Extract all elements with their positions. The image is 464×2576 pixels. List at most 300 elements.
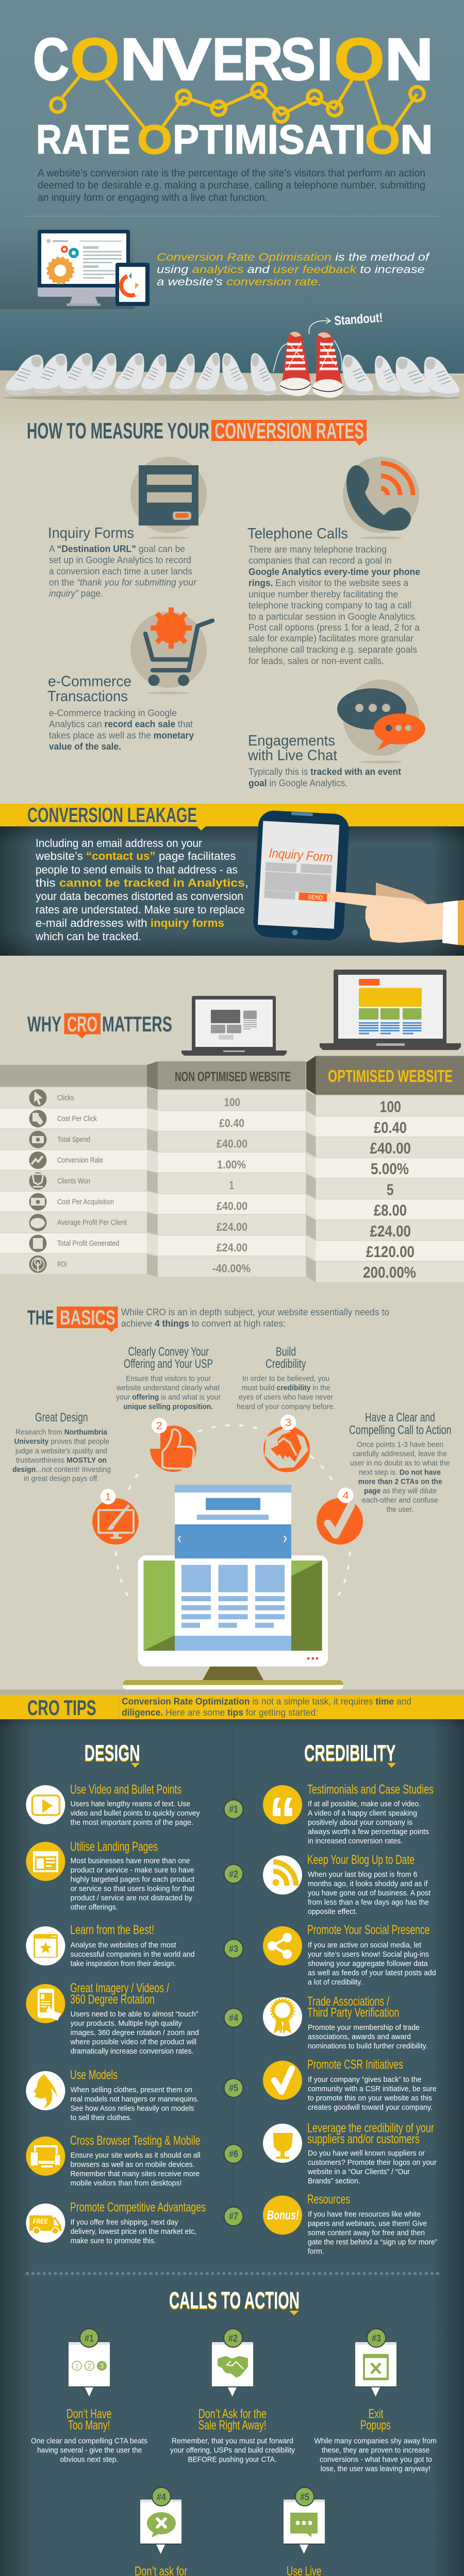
icon: pointing hand	[327, 883, 464, 945]
tip: landing pages: or service so that users looking for that	[71, 1884, 195, 1893]
card: sale right away: Sale Right Away!	[198, 2418, 267, 2433]
table optimised values: 5.00%	[371, 1160, 409, 1178]
tip: bonus resources: gate the rest behind a “sign up for more”	[308, 2238, 437, 2246]
icon: red high-top shoes	[273, 331, 343, 398]
table optimised values: £40.00	[370, 1139, 411, 1157]
title: O	[137, 116, 172, 162]
icon: star window	[26, 1926, 65, 1965]
table non optimised values: 1.00%	[217, 1158, 246, 1171]
icon: x speech bubble card: #4	[157, 2492, 166, 2503]
card: exit popups: these, they are proven to increase	[322, 2446, 430, 2455]
tip: blog: Keep Your Blog Up to Date	[307, 1853, 415, 1867]
table non optimised values: £24.00	[217, 1221, 247, 1233]
tip: video and bullet points: the most important points of the page.	[71, 1818, 193, 1827]
tip: great imagery: Great Imagery / Videos /	[70, 1981, 169, 1995]
tip: leverage suppliers: Do you have well known suppliers or	[308, 2149, 425, 2158]
intro text: an inquiry form or engaging with a live chat function.	[38, 192, 268, 204]
tip: learn from the best: Analyse the websites of the most	[71, 1941, 176, 1950]
tip: video and bullet points: Use Video and Bullet Points	[70, 1782, 181, 1797]
table optimised values: 200.00%	[363, 1263, 416, 1281]
tip: use models: real models not hangers or mannequins.	[71, 2095, 199, 2104]
tip: csr: Promote CSR Initiatives	[307, 2058, 403, 2072]
definition text: a website’s conversion rate.	[157, 276, 322, 288]
panel: conversion leakage: website’s “contact us” page facilitates	[35, 850, 236, 862]
title: N	[385, 26, 434, 93]
text: clearly convey: website understand clearly what	[116, 1384, 220, 1392]
text: build credibility: Build	[276, 1345, 296, 1359]
panel: shoes photo	[0, 309, 464, 443]
table optimised values: £0.40	[374, 1118, 407, 1137]
tip: landing pages	[26, 1839, 195, 1911]
tip: competitive advantages: If you offer free shipping, next day	[71, 2218, 178, 2227]
text: clearly convey: unique selling proposition.	[124, 1402, 213, 1411]
table non optimised values: £40.00	[217, 1199, 247, 1213]
icon: quotation mark: “	[269, 1785, 296, 1856]
icon: step 4 check mark	[317, 1488, 363, 1545]
card: exit popups: Popups	[360, 2418, 391, 2433]
table non optimised values: £0.40	[219, 1116, 244, 1129]
icon: devices	[26, 2137, 65, 2176]
tip: video and bullet points: video and bullet points to quickly convey	[71, 1809, 200, 1818]
icon: step 2 thumbs up	[150, 1418, 196, 1472]
tip: social presence: showing your aggregate follower data	[308, 1959, 428, 1968]
tip: great imagery: 360 Degree Rotation	[70, 1992, 155, 2007]
table optimised values: 100	[379, 1098, 401, 1116]
icon: monitor and tablet	[38, 230, 150, 306]
card: don't have too many: One clear and compelling CTA beats	[31, 2437, 147, 2446]
icon: telephone	[343, 456, 419, 539]
panel: inquiry forms: A “Destination URL” goal can be	[49, 544, 185, 554]
text: great design: in great design pays off.	[24, 1475, 99, 1483]
card: exit popups: While many companies shy away from	[314, 2437, 437, 2446]
icon: step 3 handshake: 3	[285, 1417, 291, 1429]
text: call to action: Have a Clear and	[365, 1411, 435, 1425]
icon: model silhouette	[26, 2071, 65, 2110]
icon: landing page	[26, 1842, 65, 1881]
title: C	[33, 26, 69, 93]
table row labels: Clicks	[57, 1094, 74, 1103]
icon: free delivery truck	[26, 2204, 65, 2243]
tip: csr: creates goodwill toward your company.	[308, 2103, 433, 2112]
icon: optimised laptop	[320, 970, 461, 1050]
heading: how to measure: CONVERSION RATES	[214, 418, 364, 444]
title: O	[70, 26, 120, 93]
panel: e-commerce: e-Commerce tracking in Google	[49, 708, 177, 718]
tip: bonus resources: form.	[308, 2247, 324, 2256]
basics intro text	[121, 1307, 389, 1329]
tip: bonus resources: If you have free resources like white	[308, 2210, 421, 2219]
tip: testimonials	[263, 1782, 434, 1856]
tip: trade associations: Trade Associations /	[307, 1994, 389, 2009]
table non optimised values	[212, 1096, 251, 1275]
tip: trade associations: Promote your membership of trade	[308, 2023, 420, 2032]
table optimised values	[363, 1098, 416, 1281]
tip: csr: If your company “gives back” to the	[308, 2075, 422, 2084]
text: great design: University proves that people	[14, 1437, 109, 1446]
title: E	[212, 26, 244, 93]
icon: rss	[263, 1855, 302, 1894]
tip: competitive advantages: make sure to promote this.	[71, 2236, 156, 2245]
text: build credibility: eyes of users who have never	[239, 1393, 333, 1401]
tip: bonus resources: Resources	[307, 2192, 350, 2207]
heading: why cro matters: CRO	[67, 1012, 97, 1036]
table non optimised values: £40.00	[217, 1138, 247, 1150]
tip: use models: Use Models	[70, 2068, 118, 2082]
table non optimised values: £24.00	[217, 1241, 247, 1254]
heading: why cro matters: WHY	[27, 1012, 61, 1036]
panel: e-commerce: value of the sale.	[49, 741, 121, 752]
panel: live chat: goal in Google Analytics.	[248, 778, 347, 788]
tip: great imagery: dramatically increase conversion rates.	[71, 2047, 193, 2056]
title: O	[334, 26, 385, 93]
tip: social presence: a lot of credibility.	[308, 1978, 362, 1987]
table optimised values: £24.00	[370, 1222, 411, 1240]
card: exit popups: lose, the user was leaving anyway!	[321, 2465, 430, 2473]
table header row: NON OPTIMISED WEBSITE	[175, 1069, 291, 1084]
tip: landing pages: Most businesses have more than one	[71, 1857, 190, 1865]
tip: competitive advantages: delivery, lowest price on the market etc,	[71, 2227, 196, 2236]
panel: telephone calls: Post call options (press 1 for a lead, 2 for a	[248, 622, 420, 633]
card: don't have too many: Don’t Have	[67, 2407, 111, 2421]
tip: trade associations: Third Party Verification	[307, 2006, 399, 2020]
table row labels: ROI	[57, 1260, 67, 1268]
tip: csr: to promote this on your website as this	[308, 2094, 432, 2103]
heading: calls to action	[169, 2287, 300, 2315]
tip: cross browser testing: Remember that many sites receive more	[71, 2170, 200, 2178]
timeline badges: #7	[229, 2211, 238, 2222]
card: sale right away: your offering, USPs and build credibility	[170, 2446, 295, 2455]
panel: inquiry forms: a conversion each time a user lands	[49, 566, 192, 577]
text: call to action: next step is. Do not have	[359, 1468, 441, 1477]
panel: telephone calls: to a particular session in Google Analytics.	[248, 612, 417, 622]
heading: the basics: THE	[27, 1307, 54, 1329]
text: build credibility	[237, 1345, 335, 1411]
heading: why cro matters: MATTERS	[102, 1012, 172, 1036]
text: great design: judge a website's quality and	[15, 1447, 107, 1455]
tip: trade associations	[263, 1994, 428, 2050]
card: exit popups: Exit	[369, 2407, 383, 2421]
icon: chat bubbles	[337, 680, 425, 764]
title: O	[365, 116, 400, 162]
tip: competitive advantages	[26, 2200, 206, 2245]
tip: testimonials: If at all possible, make use of video.	[308, 1800, 421, 1808]
heading: the basics: BASICS	[60, 1307, 115, 1329]
panel: e-commerce: e-Commerce	[48, 673, 131, 690]
panel: conversion leakage: this cannot be tracked in Analytics ,	[36, 876, 248, 889]
icon: free delivery truck: FREE	[33, 2217, 48, 2225]
text: clearly convey: Ensure that visitors to your	[126, 1375, 211, 1383]
icon: chat window card: #5	[300, 2492, 309, 2503]
heading: how to measure: HOW TO MEASURE YOUR	[27, 418, 209, 444]
icon: trophy	[263, 2124, 302, 2163]
tip: cross browser testing	[26, 2133, 201, 2188]
tip: trade associations: nominations to build further credibility.	[308, 2042, 428, 2050]
card: don't have too many: obvious next step.	[60, 2455, 119, 2464]
tip: great imagery: your products. Multiple high quality	[71, 2019, 182, 2028]
intro text: A website’s conversion rate is the percentage of the site’s visitors that perform an action	[38, 168, 425, 179]
icon: bonus badge: Bonus!	[267, 2208, 299, 2223]
card: sale right away: BEFORE pushing your CTA.	[188, 2455, 277, 2464]
panel: conversion leakage: Including an email address on your	[36, 837, 202, 850]
tip: learn from the best	[26, 1923, 195, 1968]
panel: conversion leakage: your data becomes distorted as conversion	[36, 890, 243, 903]
panel: telephone calls: Google Analytics every-time your phone	[248, 567, 420, 577]
basics intro text: achieve 4 things to convert at high rates:	[121, 1318, 286, 1329]
tip: blog: months ago, it looks shoddy and as if	[308, 1879, 428, 1888]
text: build credibility: heard of your company before.	[237, 1402, 335, 1411]
timeline badges: #3	[229, 1944, 238, 1955]
panel: live chat	[247, 680, 425, 788]
text: call to action: page as they will dilute	[364, 1487, 437, 1496]
icon: numbered circles card: 3	[100, 2362, 104, 2370]
icon: award ribbon	[263, 1997, 302, 2037]
basics intro text: While CRO is an in depth subject, your website essentially needs to	[121, 1307, 389, 1317]
tip: testimonials: A video of a happy client speaking	[308, 1809, 417, 1818]
card: exit popups	[314, 2329, 437, 2473]
callout: standout arrow: Standout!	[334, 310, 383, 328]
tip: video and bullet points: Users hate lengthy reams of text. Use	[71, 1800, 190, 1808]
tip: bonus resources	[263, 2192, 437, 2256]
table row labels: Cost Per Click	[57, 1114, 97, 1123]
icon: shopping cart	[130, 607, 212, 694]
panel: e-commerce: takes place as well as the monetary	[49, 730, 194, 740]
table: why cro matters	[0, 1056, 464, 1282]
card: sale right away: Remember, that you must put forward	[172, 2437, 293, 2446]
tip: social presence: your site’s users know! Social plug-ins	[308, 1950, 429, 1959]
tip: social presence: If you are active on social media, let	[308, 1941, 422, 1950]
card: don't have too many: Too Many!	[68, 2418, 110, 2433]
tip: blog: opposite effect.	[308, 1907, 357, 1916]
text: build credibility: In order to be believed, you	[242, 1375, 329, 1383]
panel: cro tips band	[0, 1695, 464, 1723]
title: R	[243, 26, 283, 93]
panel: tips dark background	[0, 1719, 464, 2576]
icon: exit window card	[355, 2329, 396, 2397]
icon: step 4 check mark: 4	[342, 1490, 349, 1501]
tip: bonus resources: papers and webinars, use them! Give	[308, 2219, 427, 2228]
tip: landing pages: other offerings.	[71, 1903, 118, 1911]
heading: why cro matters	[27, 1012, 172, 1039]
tip: leverage suppliers	[263, 2121, 437, 2185]
icon: step 1 design	[92, 1489, 139, 1545]
tip: leverage suppliers: website in a “Our Clients” / “Our	[307, 2167, 410, 2176]
text: build credibility: Credibility	[266, 1357, 306, 1371]
definition text: using analytics and user feedback to increase	[157, 264, 425, 276]
table row labels: Clients Won	[57, 1177, 90, 1185]
panel: hero	[0, 0, 464, 309]
text: great design: trustworthiness MOSTLY on	[16, 1456, 107, 1465]
heading: the basics	[27, 1307, 118, 1332]
panel: telephone calls: There are many telephone tracking	[248, 545, 387, 555]
tip: blog: When your last blog post is from 6	[308, 1870, 417, 1879]
title: PTIMISATI	[173, 116, 366, 162]
title: N	[120, 26, 167, 93]
tip: landing pages: product / service are not distracted by	[71, 1893, 192, 1902]
text: great design: Great Design	[35, 1411, 88, 1425]
tip: social presence: as well as feeds of your latest posts add	[308, 1969, 436, 1977]
tip: csr	[263, 2058, 437, 2112]
text: great design: design...not content! Investing	[12, 1465, 111, 1474]
tip: blog: you have gone out of business. A post	[308, 1889, 431, 1897]
table row labels: Conversion Rate	[57, 1156, 103, 1165]
text: clearly convey: Offering and Your USP	[124, 1357, 213, 1371]
text: clearly convey: your offering is and what is your	[116, 1393, 221, 1401]
tip: testimonials: in increased conversion rates.	[308, 1837, 403, 1845]
tip: leverage suppliers: customers? Promote their logos on your	[308, 2158, 437, 2167]
tip: great imagery: images, 360 degree rotation / zoom and	[71, 2028, 199, 2037]
table rows background	[0, 1088, 464, 1282]
tip: great imagery: where possible video of the product will	[70, 2038, 196, 2046]
arrows: dotted arcs	[116, 1425, 350, 1603]
panel: inquiry forms: set up in Google Analytics to record	[49, 555, 191, 565]
panel: conversion leakage: e-mail addresses with inquiry forms	[36, 917, 224, 929]
icon: phone touch	[26, 1984, 65, 2023]
panel: telephone calls: unique number thereby facilitating the	[248, 589, 398, 600]
text: call to action: more than 2 CTAs on the	[358, 1478, 442, 1486]
panel: e-commerce: Transactions	[47, 688, 128, 705]
icon: numbered circles card	[69, 2329, 110, 2397]
icon: bonus badge	[263, 2196, 302, 2235]
card: use live chat	[250, 2487, 358, 2576]
title: N	[400, 116, 433, 162]
icon: x speech bubble card	[140, 2487, 181, 2554]
icon: numbered circles card: 1	[75, 2362, 78, 2370]
card: don't have too many	[31, 2329, 147, 2464]
intro text: deemed to be desirable e.g. making a purchase, calling a telephone number, submitting	[38, 180, 425, 191]
icon: phone with inquiry form	[253, 810, 350, 941]
panel: inquiry forms	[48, 456, 207, 599]
table optimised values: £120.00	[366, 1243, 415, 1261]
icon: step 1 design: 1	[105, 1492, 111, 1503]
tip: testimonials: always worth a few percentage points	[308, 1827, 429, 1836]
panel: conversion leakage: rates are understated. Make sure to replace	[36, 903, 245, 916]
card: don't have too many: having several - give the user the	[37, 2446, 142, 2455]
title: RATE	[36, 116, 130, 162]
tip: landing pages: product or service - make sure to have	[71, 1866, 194, 1874]
panel: telephone calls: sale for example) facilitates more granular	[248, 633, 413, 643]
icon: check	[263, 2061, 302, 2100]
icon: handshake card	[212, 2329, 253, 2397]
title: S	[280, 26, 316, 93]
tip: landing pages: Utilise Landing Pages	[70, 1839, 158, 1854]
panel: e-commerce: Analytics can record each sale that	[49, 719, 193, 730]
icon: handshake card: #2	[228, 2333, 238, 2344]
tip: bonus resources: some content away for free and then	[308, 2229, 425, 2237]
card: sale right away	[170, 2329, 295, 2464]
tip: landing pages: highly targeted pages for each product	[71, 1875, 195, 1884]
table row labels: Total Profit Generated	[57, 1239, 119, 1248]
text: call to action: Once points 1-3 have been	[357, 1440, 443, 1449]
heading: credibility	[304, 1740, 396, 1768]
tip: cross browser testing: Cross Browser Testing & Mobile	[70, 2133, 201, 2148]
heading: design	[85, 1740, 140, 1768]
timeline badges: #1	[229, 1804, 238, 1815]
icon: chat window card	[284, 2487, 325, 2554]
text: call to action: carefully addressed, leave the	[353, 1450, 447, 1459]
timeline badges: #2	[229, 1869, 238, 1880]
tip: learn from the best: take inspiration from their design.	[71, 1959, 176, 1968]
tip: great imagery	[26, 1981, 199, 2056]
tip: cross browser testing: Ensure your site works as it should on all	[71, 2151, 201, 2160]
panel: telephone calls: for leads, sales or non-event calls.	[248, 656, 384, 666]
intro text	[38, 168, 425, 204]
tip: use models: See how Asos relies heavily on models	[71, 2104, 194, 2113]
tip: blog: from less than a few days ago has the	[308, 1898, 429, 1907]
panel: live chat: with Live Chat	[247, 747, 337, 764]
title: V	[163, 26, 211, 93]
title	[33, 26, 434, 162]
table row labels: Total Spend	[57, 1135, 90, 1144]
panel: conversion leakage: CONVERSION LEAKAGE	[27, 803, 197, 827]
tip: great imagery: Users need to be able to almost “touch”	[71, 2010, 198, 2019]
panel: cro tips band: CRO TIPS	[27, 1696, 96, 1720]
icon: exit window card: #3	[372, 2333, 381, 2344]
text: call to action	[349, 1411, 452, 1514]
panel: e-commerce	[47, 607, 212, 752]
panel: telephone calls: telephone tracking company to tag a call	[248, 600, 411, 611]
panel: telephone calls: companies that can record a goal in	[248, 555, 392, 566]
icon: phone with inquiry form: SEND	[308, 893, 323, 902]
tip: use models	[26, 2068, 199, 2122]
panel: inquiry forms: Inquiry Forms	[48, 525, 134, 541]
tip: learn from the best: Learn from the Best!	[70, 1923, 154, 1937]
tip: blog	[263, 1853, 431, 1916]
table non optimised values: -40.00%	[212, 1262, 251, 1275]
table row labels	[57, 1094, 127, 1268]
icon: numbered circles card: #1	[85, 2333, 94, 2344]
panel: cro tips band: Conversion Rate Optimization is not a simple task, it requires time and	[122, 1696, 411, 1706]
heading: design: DESIGN	[85, 1740, 140, 1766]
panel: inquiry forms: on the “thank you for submitting your	[49, 577, 197, 587]
text: clearly convey: Clearly Convey Your	[128, 1345, 209, 1359]
icon: non optimised laptop	[181, 996, 287, 1056]
table row labels: Cost Per Acquisition	[57, 1197, 114, 1206]
icon: phone with inquiry form: Inquiry Form	[269, 846, 333, 865]
table non optimised values: 100	[224, 1096, 240, 1109]
text: call to action: user in no doubt as to what the	[350, 1459, 450, 1468]
panel: telephone calls: Telephone Calls	[247, 526, 348, 542]
tip: social presence	[263, 1923, 436, 1987]
card: unnecessary info	[101, 2487, 221, 2576]
panel: cro tips band: diligence. Here are some tips for getting started:	[122, 1707, 318, 1718]
chart line decoration	[51, 75, 424, 128]
tip: use models: to sell their clothes.	[71, 2113, 132, 2122]
icon: share	[263, 1926, 302, 1965]
text: call to action: each-other and confuse	[362, 1496, 438, 1505]
panel: telephone calls: telephone call tracking e.g. separate goals	[248, 645, 417, 655]
card: sale right away: Don’t Ask for the	[198, 2407, 267, 2421]
panel: inquiry forms: inquiry” page.	[49, 588, 103, 599]
definition text: Conversion Rate Optimisation is the method of	[157, 251, 430, 263]
tip: cross browser testing: mobile visitors than from desktops!	[71, 2179, 181, 2188]
callout: standout arrow	[309, 310, 383, 334]
tip: use models: When selling clothes, present them on	[71, 2086, 192, 2094]
panel: telephone calls: rings. Each visitor to the website sees a	[248, 578, 409, 588]
heading: calls to action: CALLS TO ACTION	[169, 2287, 300, 2313]
icon: step 2 thumbs up: 2	[156, 1420, 162, 1432]
timeline badges	[224, 1800, 243, 2226]
panel: conversion leakage: which can be tracked.	[35, 930, 141, 943]
tip: cross browser testing: browsers as well as on mobile devices.	[71, 2160, 195, 2169]
title: I	[317, 26, 333, 93]
card: exit popups: conversions - what have you got to	[320, 2455, 432, 2464]
icon: step 3 handshake	[263, 1415, 310, 1472]
tip: competitive advantages: Promote Competitive Advantages	[70, 2200, 206, 2215]
tip: csr: community with a CSR initiative, be sure	[308, 2084, 437, 2093]
table row icons	[29, 1089, 46, 1273]
text: great design	[12, 1411, 111, 1483]
icon: form	[130, 456, 207, 539]
